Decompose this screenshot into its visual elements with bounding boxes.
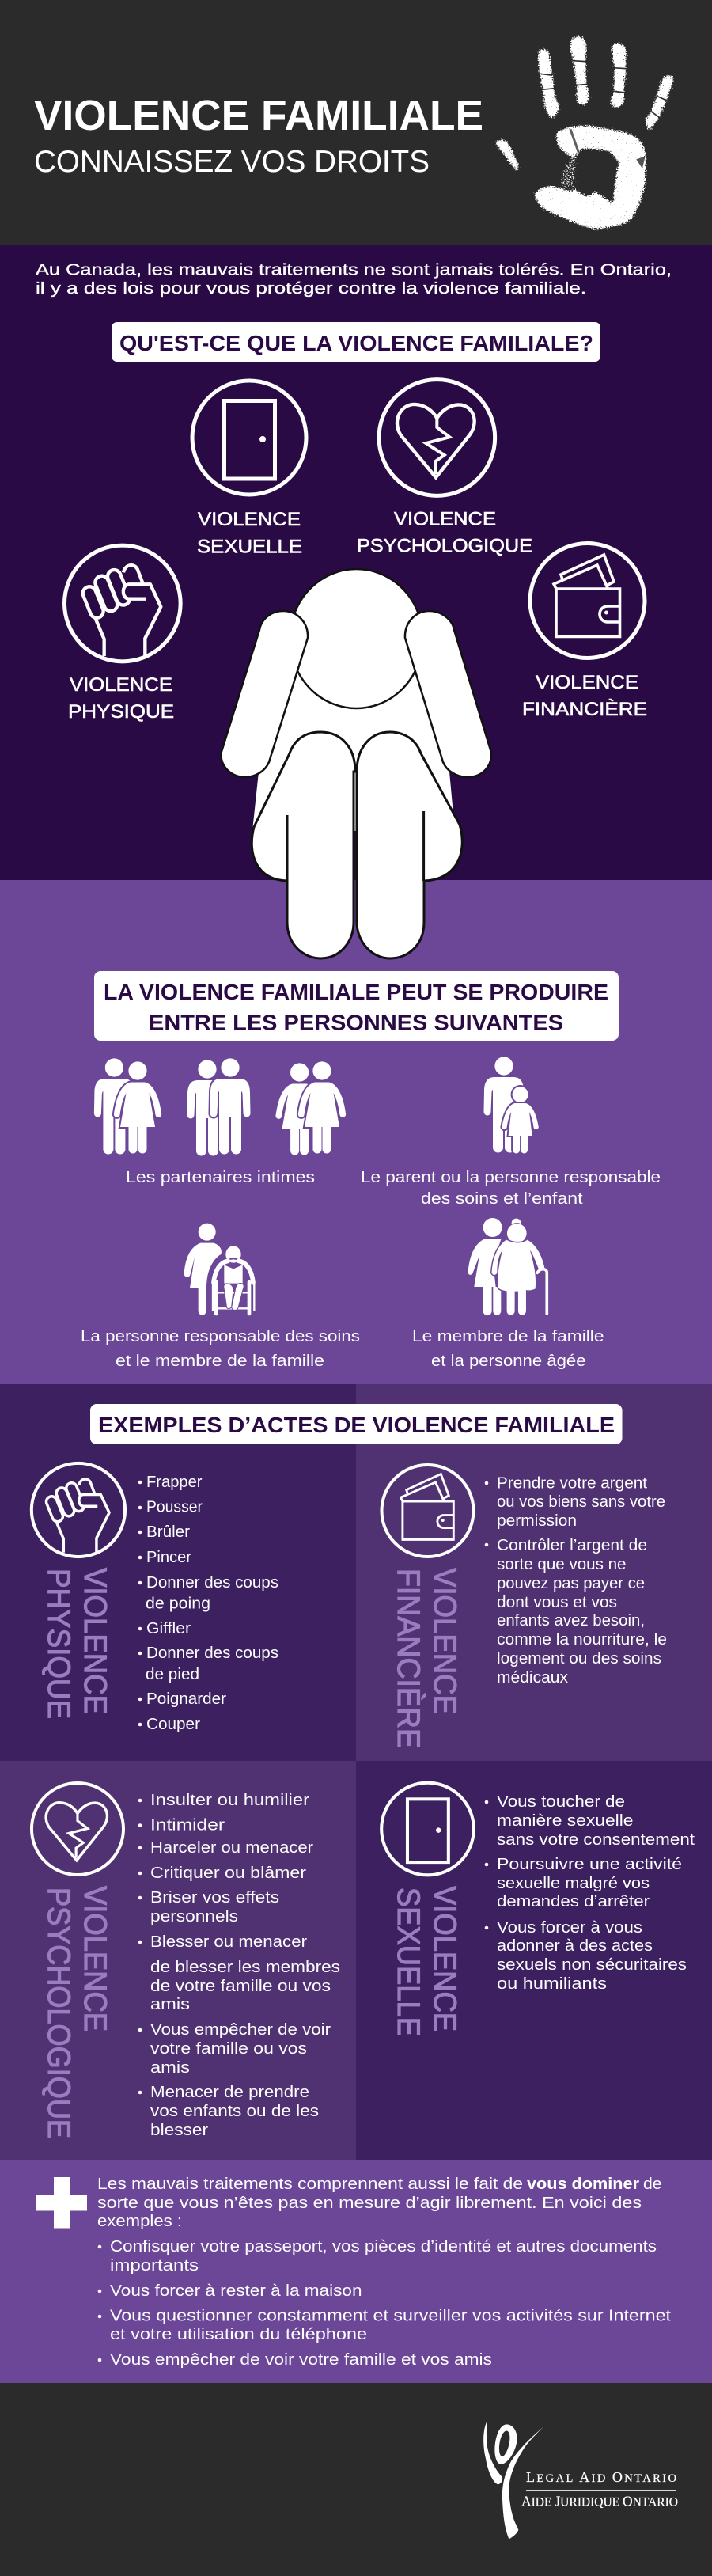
label: sexual violence: SEXUELLE	[197, 537, 302, 557]
list: sexual acts: manière sexuelle	[497, 1812, 633, 1830]
heading: what is family violence	[112, 322, 600, 362]
list: psychological acts: amis	[150, 1996, 190, 2013]
label: physical violence: PHYSIQUE	[68, 701, 174, 723]
list: sexual acts: adonner à des actes	[497, 1937, 653, 1955]
label: psychological violence	[357, 508, 532, 557]
list: physical acts: de poing	[146, 1595, 210, 1613]
icon: white handprint	[494, 36, 674, 230]
list: financial acts: Prendre votre argent	[497, 1475, 647, 1493]
list: coercive control examples: Vous questionner constamment et surveiller vos activités sur Internet	[110, 2308, 672, 2325]
list: physical acts: Donner des coups	[146, 1574, 278, 1592]
text: coercive control introduction: de	[643, 2176, 661, 2193]
list: financial acts: médicaux	[497, 1669, 568, 1686]
label: financial violence: FINANCIÈRE	[522, 699, 647, 720]
list: psychological acts: de blesser les membres	[150, 1959, 340, 1976]
text: coercive control introduction: vous dominer	[527, 2176, 639, 2193]
label: psychological violence: VIOLENCE	[394, 508, 496, 530]
heading: examples of family violence	[90, 1404, 622, 1444]
caption: parent and child: des soins et l’enfant	[421, 1190, 583, 1208]
intro text: il y a des lois pour vous protéger contre la violence familiale.	[36, 280, 586, 298]
vertical label: sexual violence	[391, 1886, 462, 2036]
list: sexual acts: Vous toucher de	[497, 1793, 625, 1811]
list: coercive control examples: Confisquer votre passeport, vos pièces d’identité et autres documents	[110, 2238, 657, 2255]
logo mark: swoosh figure	[483, 2421, 543, 2539]
list: coercive control examples: Vous forcer à rester à la maison	[110, 2282, 362, 2300]
list: psychological acts: de votre famille ou vos	[150, 1978, 331, 1995]
icon: door	[192, 381, 306, 495]
list: financial acts: logement ou des soins	[497, 1650, 661, 1667]
intro text	[36, 261, 672, 298]
list: psychological acts: Vous empêcher de voir	[150, 2021, 331, 2039]
list: financial acts: dont vous et vos	[497, 1594, 617, 1611]
list: psychological acts: amis	[150, 2059, 190, 2077]
caption: family member and senior	[412, 1328, 604, 1370]
heading: between the following persons: LA VIOLENCE FAMILIALE PEUT SE PRODUIRE	[104, 980, 608, 1004]
list: financial acts: sorte que vous ne	[497, 1556, 627, 1573]
list: sexual acts: sans votre consentement	[497, 1831, 695, 1849]
subtitle: CONNAISSEZ VOS DROITS	[34, 145, 430, 179]
panel: who is affected	[0, 880, 712, 1384]
list: sexual acts: Vous forcer à vous	[497, 1919, 642, 1937]
text: coercive control introduction: sorte que vous n’êtes pas en mesure d’agir librement. En voici des	[97, 2195, 642, 2212]
list: psychological acts: personnels	[150, 1908, 238, 1925]
panel: what is family violence	[0, 245, 712, 880]
icon: fist	[32, 1463, 125, 1557]
panel: coercive control	[0, 2160, 712, 2383]
icon: broken heart	[379, 380, 495, 495]
vertical label: psychological violence: PSYCHOLOGIQUE	[41, 1887, 76, 2138]
icon: wallet	[381, 1465, 473, 1557]
icon: door	[381, 1783, 474, 1875]
label: physical violence	[68, 674, 174, 723]
icon: broken heart	[32, 1783, 123, 1875]
list: psychological acts: Harceler ou menacer	[150, 1839, 313, 1857]
list: psychological acts: Blesser ou menacer	[150, 1933, 307, 1951]
list: psychological acts	[138, 1792, 340, 2139]
vertical label: financial violence: VIOLENCE	[427, 1568, 462, 1714]
panel: financial violence examples	[356, 1384, 712, 1761]
list: financial acts: enfants avez besoin,	[497, 1612, 645, 1629]
list: coercive control examples: Vous empêcher de voir votre famille et vos amis	[110, 2351, 492, 2369]
list: coercive control examples	[98, 2238, 672, 2369]
list: physical acts: de pied	[146, 1666, 199, 1683]
icon: two women couple	[275, 1061, 346, 1155]
caption: caregiver and family member: et le membre de la famille	[116, 1352, 324, 1370]
vertical label: physical violence	[41, 1568, 112, 1719]
list: sexual acts: ou humiliants	[497, 1975, 607, 1993]
list: physical acts: Donner des coups	[146, 1645, 278, 1662]
list: financial acts: comme la nourriture, le	[497, 1631, 667, 1648]
caption: caregiver and family member	[81, 1328, 360, 1370]
icon: two men couple	[187, 1058, 250, 1155]
list: physical acts: Poignarder	[146, 1690, 226, 1708]
label: sexual violence	[197, 509, 302, 557]
list: physical acts	[138, 1474, 278, 1733]
list: physical acts: Couper	[146, 1716, 200, 1733]
label: sexual violence: VIOLENCE	[198, 509, 301, 530]
label: financial violence	[522, 672, 647, 720]
list: financial acts: pouvez pas payer ce	[497, 1575, 645, 1592]
panel: header	[0, 0, 712, 245]
caption: family member and senior: Le membre de la famille	[412, 1328, 604, 1345]
title: VIOLENCE FAMILIALE	[34, 92, 483, 139]
panel: psychological violence examples	[0, 1761, 356, 2160]
heading: between the following persons: ENTRE LES PERSONNES SUIVANTES	[149, 1010, 563, 1035]
panel: physical violence examples	[0, 1384, 356, 1761]
text: coercive control introduction: Les mauvais traitements comprennent aussi le fait de	[97, 2176, 523, 2193]
list: psychological acts: Briser vos effets	[150, 1889, 279, 1906]
icon: plus sign	[36, 2177, 87, 2229]
list: psychological acts: Menacer de prendre	[150, 2084, 309, 2101]
logo text: French: AIDE JURIDIQUE ONTARIO	[521, 2493, 678, 2509]
text: coercive control introduction	[97, 2176, 661, 2230]
vertical label: physical violence: VIOLENCE	[78, 1568, 112, 1714]
icon: family member and senior with cane	[468, 1218, 547, 1315]
list: psychological acts: Insulter ou humilier	[150, 1792, 309, 1809]
list: financial acts	[485, 1475, 667, 1686]
panel: sexual violence examples	[356, 1761, 712, 2160]
caption: intimate partners: Les partenaires intimes	[126, 1169, 315, 1186]
vertical label: sexual violence: VIOLENCE	[427, 1886, 462, 2032]
label: psychological violence: PSYCHOLOGIQUE	[357, 535, 532, 557]
vertical label: sexual violence: SEXUELLE	[391, 1887, 426, 2036]
text: coercive control introduction: exemples :	[97, 2213, 182, 2230]
icon: wallet	[530, 543, 645, 658]
icon: man and woman couple	[94, 1058, 161, 1154]
list: psychological acts: blesser	[150, 2122, 208, 2139]
vertical label: psychological violence	[41, 1886, 112, 2138]
vertical label: financial violence: FINANCIÈRE	[391, 1569, 426, 1748]
logo text: English: LEGAL AID ONTARIO	[526, 2469, 676, 2485]
list: psychological acts: vos enfants ou de les	[150, 2103, 319, 2120]
heading: examples of family violence: EXEMPLES D’ACTES DE VIOLENCE FAMILIALE	[98, 1413, 615, 1437]
list: physical acts: Giffler	[146, 1620, 191, 1637]
figure: seated person with head in hands	[221, 569, 491, 958]
list: sexual acts	[485, 1793, 695, 1993]
list: sexual acts: sexuels non sécuritaires	[497, 1956, 687, 1974]
list: physical acts: Pousser	[146, 1499, 203, 1516]
caption: family member and senior: et la personne âgée	[431, 1352, 585, 1370]
icon: caregiver and person in wheelchair	[184, 1224, 254, 1315]
caption: parent and child	[361, 1169, 661, 1208]
label: financial violence: VIOLENCE	[536, 672, 638, 693]
list: sexual acts: Poursuivre une activité	[497, 1856, 682, 1873]
icon: parent and child	[484, 1057, 539, 1154]
list: financial acts: permission	[497, 1512, 577, 1530]
list: coercive control examples: importants	[110, 2257, 199, 2274]
vertical label: psychological violence: VIOLENCE	[78, 1886, 112, 2032]
list: sexual acts: demandes d’arrêter	[497, 1893, 650, 1910]
logo: Legal Aid Ontario	[483, 2421, 678, 2539]
panel: examples	[0, 1384, 712, 2160]
heading: between the following persons	[94, 971, 619, 1041]
list: psychological acts: votre famille ou vos	[150, 2040, 307, 2058]
list: financial acts: Contrôler l’argent de	[497, 1537, 647, 1554]
list: psychological acts: Intimider	[150, 1817, 225, 1834]
panel: footer	[0, 2383, 712, 2576]
icon: fist	[64, 545, 180, 662]
vertical label: financial violence	[391, 1568, 462, 1748]
label: physical violence: VIOLENCE	[70, 674, 172, 696]
heading: what is family violence: QU'EST-CE QUE LA VIOLENCE FAMILIALE?	[119, 331, 593, 355]
list: sexual acts: sexuelle malgré vos	[497, 1875, 650, 1892]
list: physical acts: Pincer	[146, 1549, 191, 1566]
list: physical acts: Frapper	[146, 1474, 203, 1491]
list: coercive control examples: et votre utilisation du téléphone	[110, 2326, 367, 2343]
list: psychological acts: Critiquer ou blâmer	[150, 1865, 306, 1882]
list: financial acts: ou vos biens sans votre	[497, 1493, 665, 1511]
caption: parent and child: Le parent ou la personne responsable	[361, 1169, 661, 1186]
intro text: Au Canada, les mauvais traitements ne sont jamais tolérés. En Ontario,	[36, 261, 672, 279]
list: physical acts: Brûler	[146, 1523, 190, 1541]
caption: caregiver and family member: La personne responsable des soins	[81, 1328, 360, 1345]
vertical label: physical violence: PHYSIQUE	[41, 1569, 76, 1719]
